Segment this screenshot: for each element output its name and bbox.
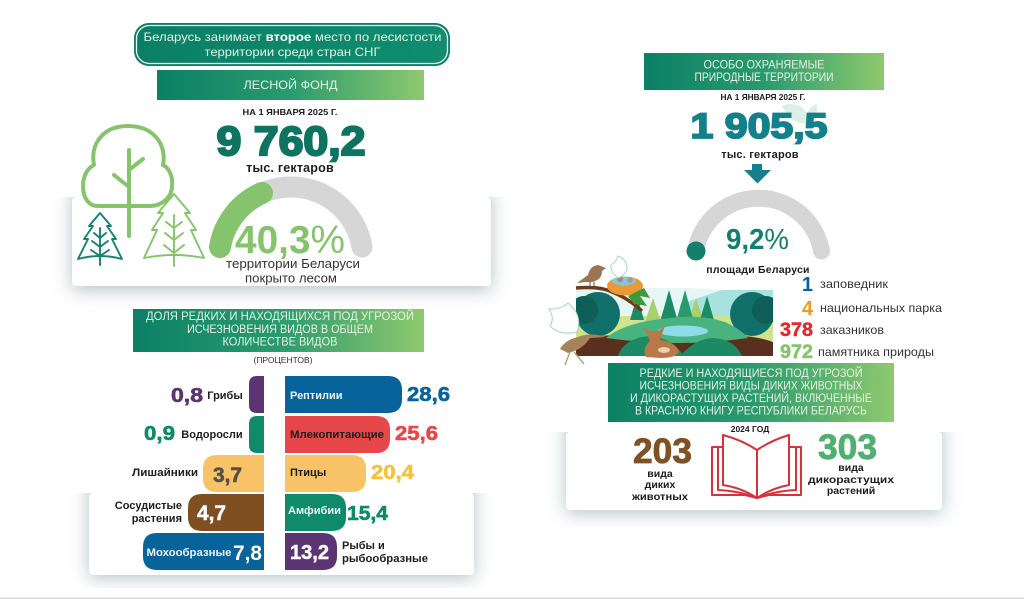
number: forest area: 9 760,2: [216, 118, 366, 164]
stat: animals: 203: [633, 432, 692, 471]
stat: animals: вида: [647, 468, 673, 480]
callout: second place in forest cover: Беларусь занимает второе место по лесистости: [144, 30, 442, 44]
bar: lichens: Лишайники: [132, 467, 198, 479]
heading: forest fund: ЛЕСНОЙ ФОНД: [244, 77, 338, 92]
stat: animals: [631, 432, 692, 503]
icon: heron: [560, 334, 606, 365]
stat: national parks: национальных парка: [820, 301, 942, 315]
text: territory covered: [226, 257, 360, 286]
panel: forest card: [72, 190, 491, 290]
bar: lichens: [132, 455, 264, 492]
stat: reserve: [802, 274, 889, 296]
stat: sanctuaries: заказников: [820, 323, 884, 337]
bar: birds: Птицы: [290, 467, 326, 479]
bar: mammals: Млекопитающие: [290, 429, 384, 441]
heading: species share: ДОЛЯ РЕДКИХ И НАХОДЯЩИХСЯ ПОД УГРОЗОЙ: [146, 310, 414, 323]
value: 40.3%: 40,3%: [235, 219, 345, 262]
bar: amphibians: 15,4: [347, 503, 389, 525]
stat: monuments: [780, 342, 934, 363]
bar: algae: Водоросли: [181, 429, 243, 441]
bar: algae: 0,9: [144, 423, 175, 445]
icon: dark fir tree: [78, 213, 122, 265]
heading: species share: КОЛИЧЕСТВЕ ВИДОВ: [222, 336, 338, 348]
bar: amphibians: Амфибии: [288, 505, 341, 517]
stat: plants: вида: [838, 462, 864, 474]
bar: fungi: 0,8: [171, 385, 203, 407]
icon: nest: [607, 276, 643, 296]
stat: reserve: 1: [802, 274, 813, 296]
icon: open book: [712, 435, 801, 498]
icon: pale leaves: [782, 104, 817, 124]
stat: monuments: 972: [780, 342, 813, 363]
value: 9.2%: 9,2%: [726, 224, 789, 256]
bar chart: right side: [285, 376, 450, 570]
bar: amphibians: [285, 494, 389, 531]
bar: bryophytes: Мохообразные: [146, 547, 232, 559]
year: 2024 ГОД: [731, 424, 769, 434]
panel: species bars card: [89, 480, 474, 578]
icon: large deciduous tree: [83, 126, 172, 236]
date: protected: НА 1 ЯНВАРЯ 2025 Г.: [720, 92, 806, 102]
bar: fish: Рыбы и: [342, 540, 385, 552]
bar: mammals: [285, 416, 438, 453]
stat: sanctuaries: 378: [780, 320, 813, 341]
heading: red book: ИСЧЕЗНОВЕНИЯ ВИДЫ ДИКИХ ЖИВОТНЫХ: [640, 380, 863, 392]
unit: thousand hectares: тыс. гектаров: [246, 161, 334, 175]
icon: green leaves on branch: [628, 288, 650, 306]
bar: lichens: 3,7: [213, 464, 242, 487]
heading: species share: [133, 309, 424, 352]
bar: birds: [285, 455, 415, 492]
bar chart: left side: [115, 376, 264, 570]
bar: fungi: Грибы: [207, 390, 243, 402]
stat: plants: [808, 428, 894, 497]
heading: forest fund: [157, 70, 424, 100]
bar: reptiles: [285, 376, 450, 413]
bar: fish: 13,2: [290, 542, 329, 564]
stat: animals: животных: [631, 491, 688, 503]
gauge: protected 9.2%: [686, 198, 822, 260]
callout: second place in forest cover: [134, 23, 450, 66]
stats: protected area types: [780, 274, 942, 363]
stat: animals: диких: [645, 479, 675, 491]
heading: red book: [608, 363, 894, 422]
icon: deer: [642, 326, 679, 358]
bar: algae: [144, 416, 264, 453]
bar: fish: рыбообразные: [342, 553, 428, 565]
heading: red book: РЕДКИЕ И НАХОДЯЩИЕСЯ ПОД УГРОЗОЙ: [640, 367, 862, 380]
text: territory covered: покрыто лесом: [245, 272, 337, 286]
heading: red book: В КРАСНУЮ КНИГУ РЕСПУБЛИКИ БЕЛАРУСЬ: [635, 406, 867, 418]
text: territory covered: территории Беларуси: [226, 257, 360, 271]
bar: fungi: [171, 376, 264, 413]
bar: fish: [285, 533, 428, 570]
stat: national parks: 4: [802, 298, 814, 320]
stat: reserve: заповедник: [820, 277, 889, 291]
callout: second place in forest cover: территории среди стран СНГ: [204, 45, 381, 59]
unit: thousand hectares: тыс. гектаров: [721, 149, 799, 161]
illustration: nature scene: [549, 256, 780, 365]
bar: reptiles: 28,6: [407, 384, 450, 406]
icon: leaf outline left: [549, 303, 579, 333]
bar: vascular plants: 4,7: [197, 502, 226, 525]
gauge: forest 40.3%: [220, 187, 362, 247]
stat: plants: растений: [827, 485, 875, 497]
note: percent: (ПРОЦЕНТОВ): [254, 355, 313, 365]
heading: protected areas: [644, 53, 884, 90]
icon: sparrow: [577, 265, 606, 287]
stat: plants: 303: [818, 428, 877, 467]
bar: birds: 20,4: [371, 462, 415, 484]
icon: leaf outline top: [611, 256, 627, 278]
bar: vascular plants: растения: [132, 513, 182, 525]
stat: national parks: [802, 298, 942, 320]
heading: protected areas: ПРИРОДНЫЕ ТЕРРИТОРИИ: [694, 72, 834, 84]
bar: mammals: 25,6: [395, 423, 438, 445]
bar: reptiles: Рептилии: [290, 390, 342, 402]
heading: protected areas: ОСОБО ОХРАНЯЕМЫЕ: [704, 60, 825, 72]
icon: light fir tree: [144, 194, 204, 266]
arrow: down: [744, 164, 771, 184]
number: protected area: 1 905,5: [690, 107, 828, 146]
bar: vascular plants: Сосудистые: [115, 500, 182, 512]
stat: plants: дикорастущих: [808, 474, 894, 486]
bar: bryophytes: 7,8: [233, 542, 262, 565]
heading: red book: И ДИКОРАСТУЩИХ РАСТЕНИЙ, ВКЛЮЧЕННЫЕ: [630, 392, 872, 405]
bar: vascular plants: [115, 494, 264, 531]
date: forest: НА 1 ЯНВАРЯ 2025 Г.: [242, 107, 338, 117]
stat: monuments: памятника природы: [818, 345, 934, 359]
heading: species share: ИСЧЕЗНОВЕНИЯ ВИДОВ В ОБЩЕМ: [187, 324, 373, 336]
panel: red book card: [566, 420, 942, 513]
bar: bryophytes: [143, 533, 264, 570]
text: area of Belarus: площади Беларуси: [706, 264, 810, 276]
stat: sanctuaries: [780, 320, 884, 341]
